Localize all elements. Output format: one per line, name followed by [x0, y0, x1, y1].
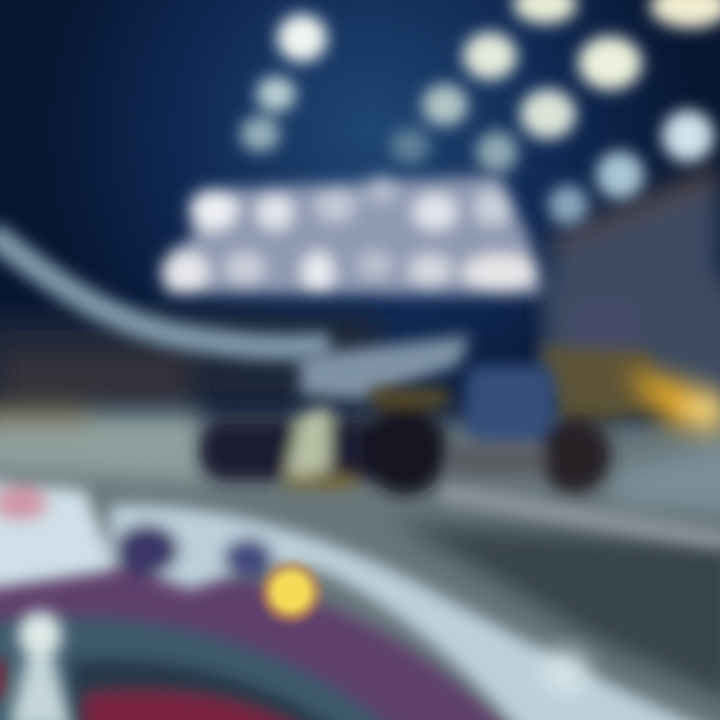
dark mid-ground band [0, 315, 380, 405]
foreground purple bodywork [0, 560, 520, 720]
soft highlight on bodywork [543, 652, 587, 692]
race car [200, 300, 720, 495]
car body [200, 365, 611, 495]
foreground white figure [0, 611, 72, 720]
track white line [440, 492, 720, 540]
curved track barrier [0, 232, 330, 347]
track surface [0, 405, 720, 720]
car wing and upper body [300, 300, 660, 430]
floodlights [240, 0, 720, 225]
building on the right [548, 165, 720, 400]
yellow engine glow [625, 370, 720, 435]
windscreen dark curve [0, 617, 410, 720]
yellow dot [261, 562, 321, 622]
sky background [0, 0, 720, 420]
blurred headline lettering [161, 175, 545, 295]
foreground pale blue panel [0, 480, 720, 720]
